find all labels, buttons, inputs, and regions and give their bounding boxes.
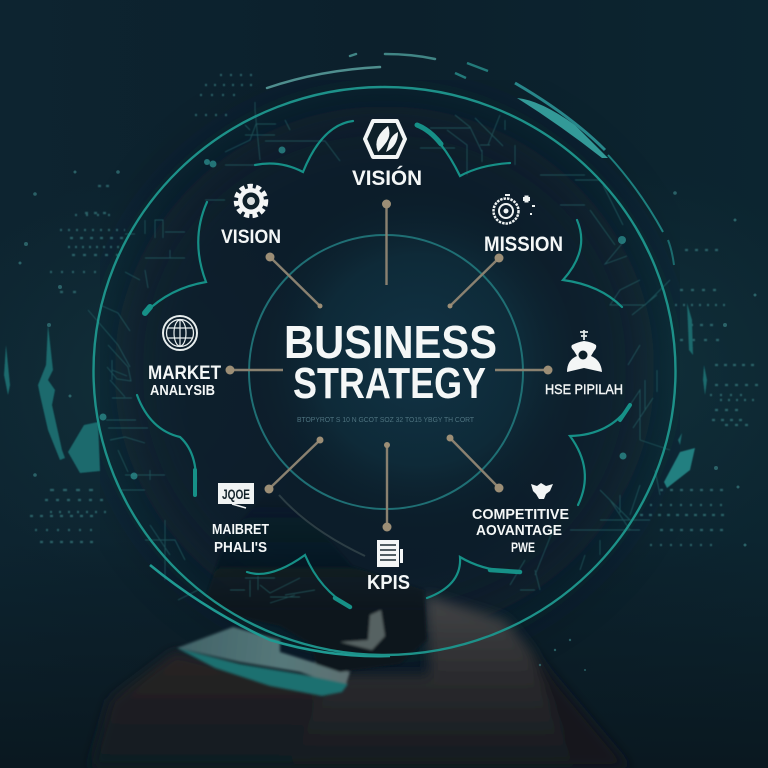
icon: globe [163,316,197,350]
faint line continuing from hand [279,495,365,556]
connector right [495,366,552,374]
gap between fingers [340,610,385,650]
node: kpis [367,540,410,594]
wood table left [90,652,460,768]
scattered dots [18,170,756,671]
node: market phalis: MAIBRET [212,521,269,538]
side glow left [0,0,400,640]
node: mission [484,195,563,256]
connector lower left [264,436,324,494]
hand silhouette [205,490,427,672]
icon: gear [236,186,266,216]
icon: winged emblem [531,483,553,499]
icon: hexagon leaf [365,121,405,157]
light reflection patch [177,627,350,688]
connector lower right [446,434,504,492]
lit table surface [290,595,575,768]
node: market analysis: MARKET [148,363,221,384]
node: kpis: KPIS [367,572,410,594]
circuit traces [88,102,670,603]
scalloped inner outline [137,121,630,607]
node: competitive advantage: PWE [511,539,535,555]
data dot clusters [30,75,760,545]
bottom darkening [0,540,768,768]
outer swooshes [150,54,674,656]
foreground blur group [177,490,427,696]
icon: document [377,540,403,567]
node: competitive advantage: COMPETITIVE [472,506,569,523]
connector upper left [266,252,322,308]
side glow right [400,0,768,640]
connectors [226,200,552,532]
node: vision left: VISION [221,227,281,248]
title: BUSINESS [284,316,497,368]
connector left [226,366,283,374]
ring interior shade [114,106,654,636]
icon: note card: JQOE [222,486,250,502]
node: vision top: VISIÓN [352,166,422,190]
node: market analysis [148,316,221,399]
icon: person [567,330,602,372]
teal reflection [177,648,348,696]
teal brush blobs [4,303,707,488]
title [284,316,497,408]
connector upper right [448,254,504,308]
node: market phalis: PHALI'S [214,540,267,556]
desk scene with hand [90,490,630,768]
table blur group [90,595,630,768]
node: market phalis [212,483,269,556]
node: vision left [221,186,281,248]
node: competitive advantage [472,483,569,555]
connector top [382,200,391,285]
inner hub circle [249,235,523,509]
node: right person: HSE PIPILAH [545,381,623,397]
subtitle small text: BTOPYROT S 10 N GCOT SOZ 32 TO15 YBGY TH CORT [297,417,475,424]
dark table right [510,625,630,768]
node: market analysis: ANALYSIB [150,382,215,399]
node: mission: MISSION [484,233,563,256]
node: competitive advantage: AOVANTAGE [476,522,562,539]
icon: target [494,195,535,224]
node: right person [545,330,623,397]
center glow [225,190,575,540]
connector bottom [382,442,392,532]
title: STRATEGY [293,359,486,408]
node: vision top [352,121,422,190]
circuit nodes [100,146,626,480]
main outer ring [94,87,676,655]
